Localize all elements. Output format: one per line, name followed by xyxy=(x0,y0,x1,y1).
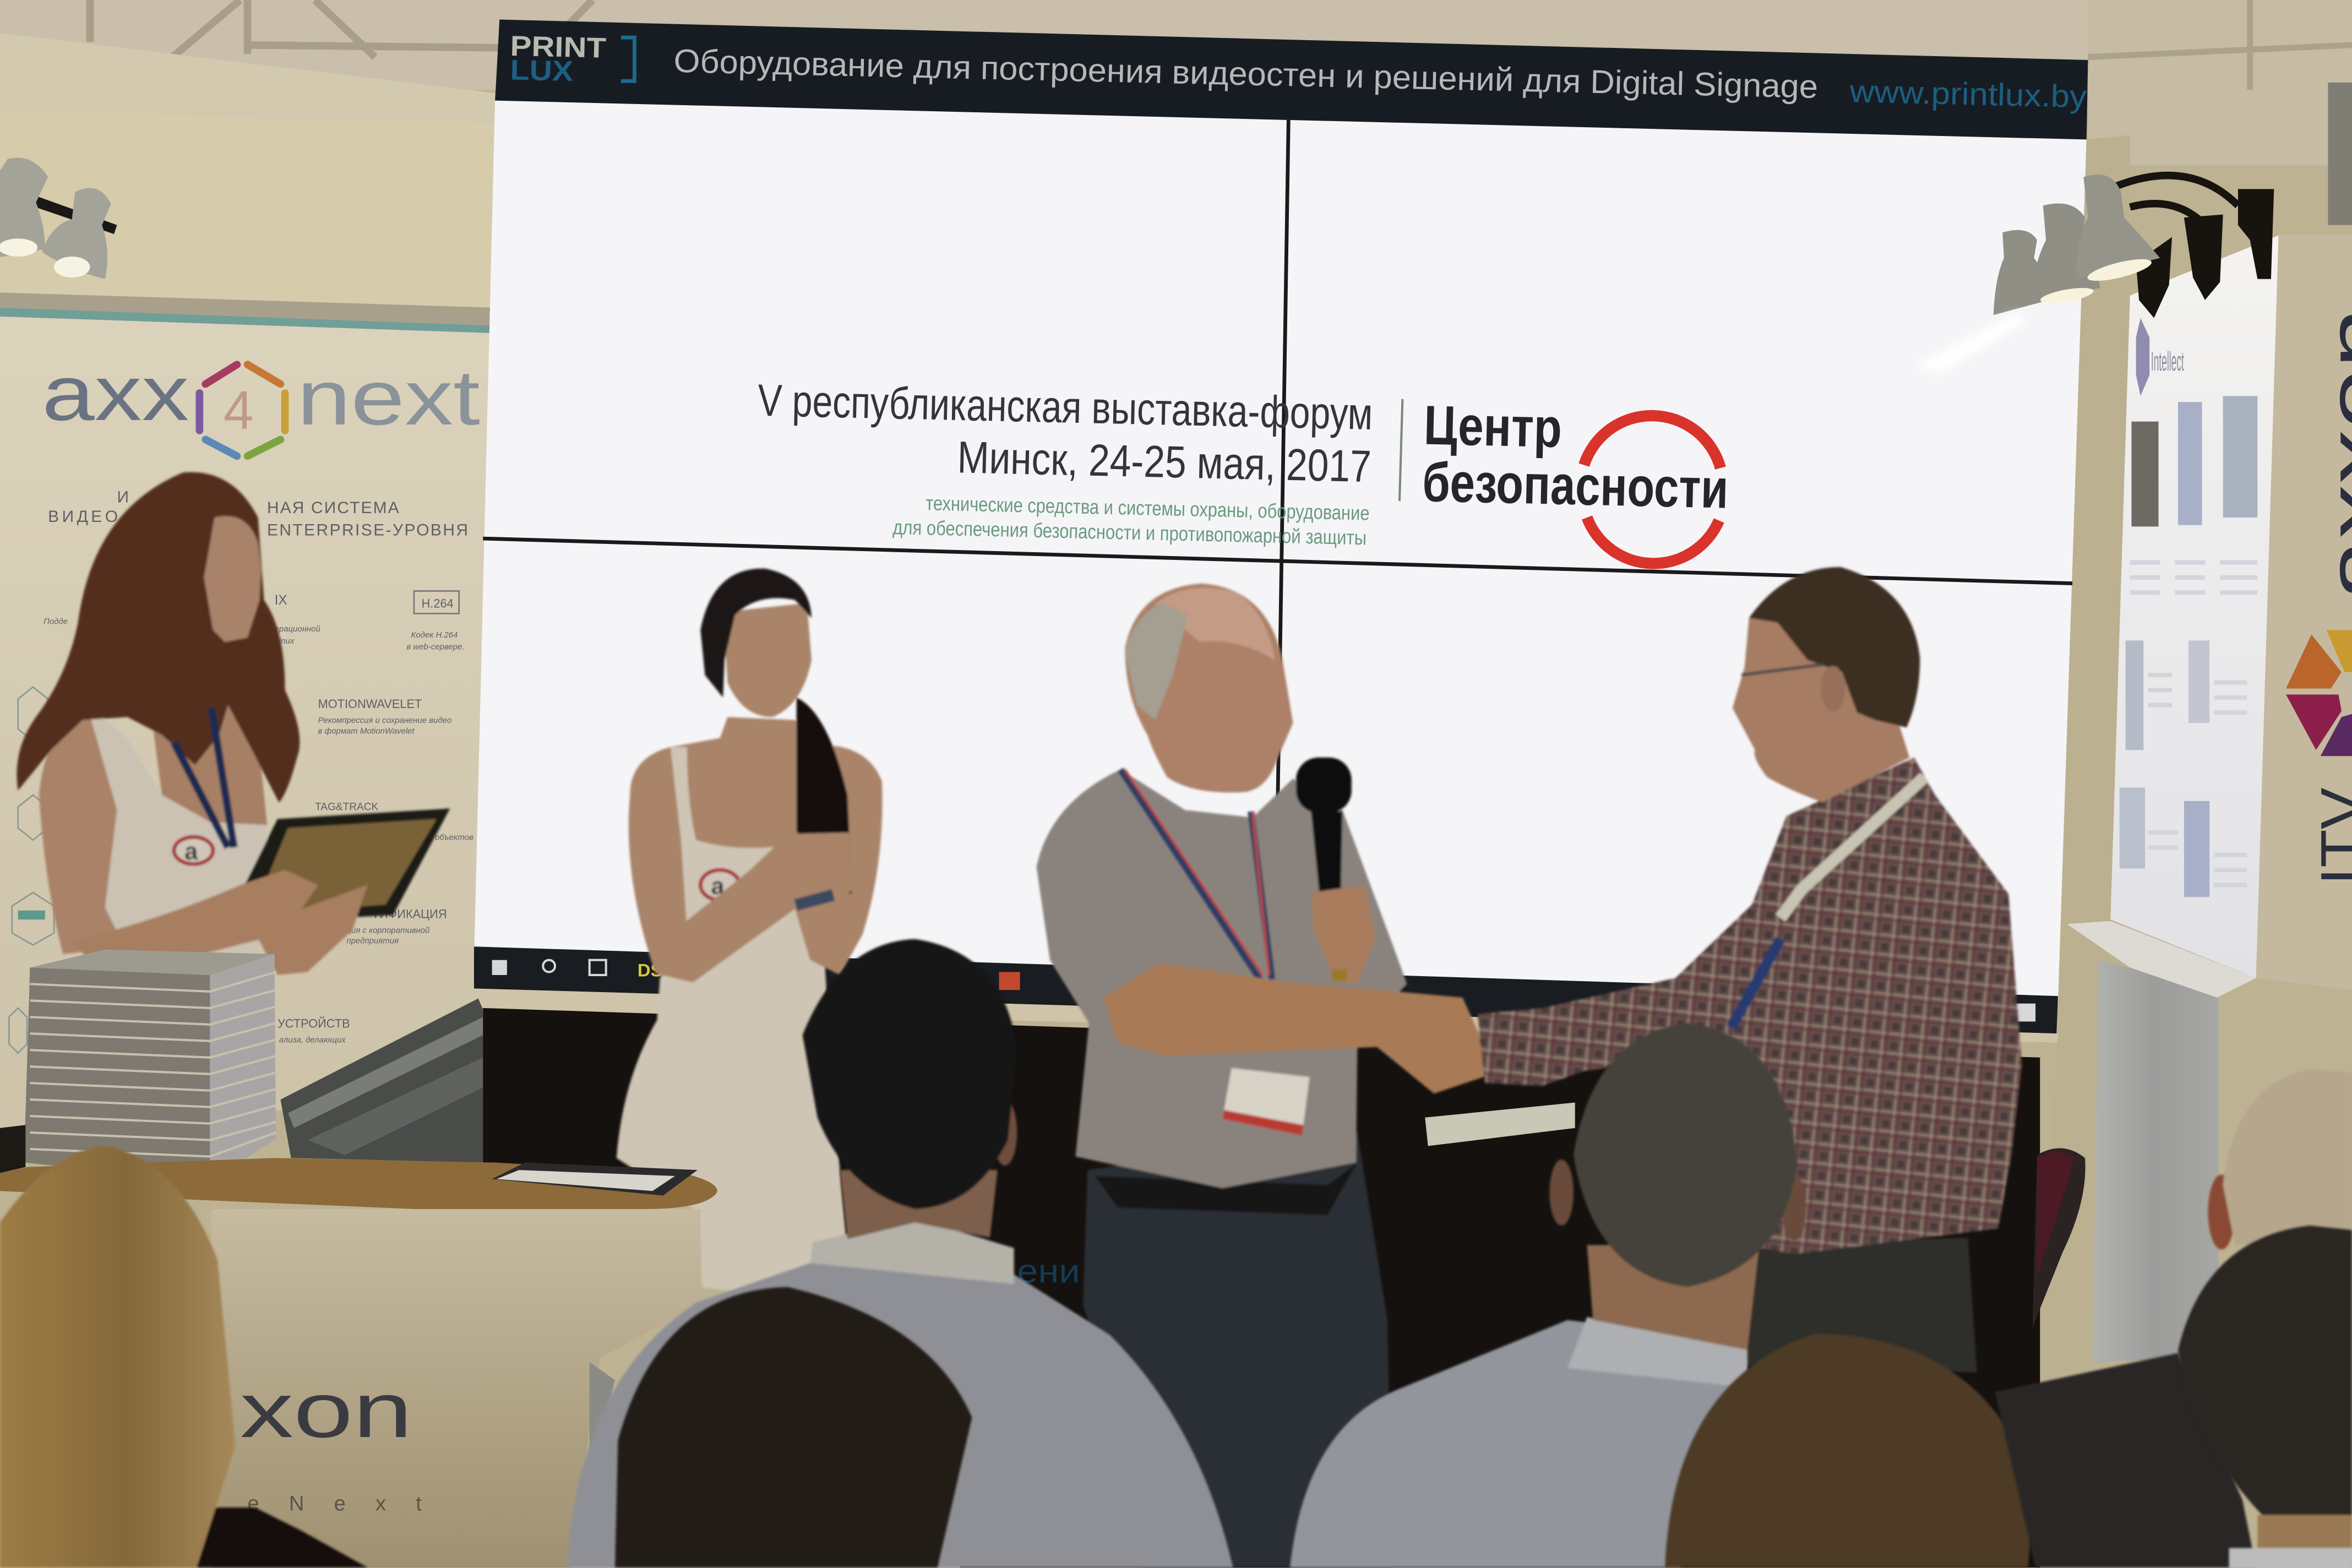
lamp shades xyxy=(1994,230,2049,315)
lanyard xyxy=(174,708,234,847)
hair top xyxy=(700,569,812,698)
hair xyxy=(1749,567,1920,727)
video wall screen xyxy=(474,101,2087,1043)
lanyard xyxy=(1781,777,1925,918)
left lanyard xyxy=(1120,770,1260,979)
dark shoulder xyxy=(188,1507,368,1567)
shirt logo xyxy=(174,837,213,865)
dark stage backdrop xyxy=(483,1008,2040,1567)
neck xyxy=(2257,1515,2352,1551)
banner feature list: Кодек H.264 xyxy=(411,630,458,640)
stack of frames on desk xyxy=(24,950,276,1182)
print lux header banner: LUX xyxy=(510,53,574,87)
banner feature list: в формат MotionWavelet xyxy=(318,726,415,736)
badge xyxy=(1222,1068,1309,1135)
audience: blonde woman at left xyxy=(0,1146,368,1567)
screen title text: V республиканская выставка-форум xyxy=(757,375,1373,439)
centre logo text xyxy=(1422,395,1729,520)
white dress xyxy=(617,747,847,1293)
right wall section xyxy=(2034,135,2130,1380)
long hair xyxy=(0,1146,236,1567)
desk front with axxon logo: e N e x t xyxy=(248,1492,434,1516)
lamps right xyxy=(1994,175,2274,318)
suit xyxy=(1995,1353,2256,1567)
poster logo xyxy=(2136,318,2149,396)
banner logo number: 4 xyxy=(224,380,253,440)
arm in handshake xyxy=(1104,963,1497,1093)
grey hair head xyxy=(2223,1070,2352,1245)
banner feature list: MOTIONWAVELET xyxy=(318,697,422,711)
banner url: www.printlux.by xyxy=(1849,74,2087,115)
video wall screen: для обеспечения безопасности и противопожарной защиты xyxy=(892,516,1367,549)
axxon hexagon logo xyxy=(2286,630,2352,756)
banner feature list: H.264 xyxy=(422,596,454,610)
ear xyxy=(993,1099,1017,1166)
banner feature list: УСТРОЙСТВ xyxy=(277,1016,350,1030)
ear xyxy=(2208,1174,2235,1250)
hair xyxy=(803,939,1017,1209)
centre logo text: безопасности xyxy=(1422,451,1729,520)
audience: foreground brown head xyxy=(1665,1333,2035,1567)
banner feature list: в web-сервере. xyxy=(406,643,465,652)
banner logo: axx: axx xyxy=(42,350,189,437)
lamps left xyxy=(0,158,117,279)
audience: dark head far right xyxy=(2178,1226,2352,1568)
backdrop blue lettering: ени xyxy=(1017,1253,1080,1289)
jeans xyxy=(1083,1133,1392,1567)
head xyxy=(1125,584,1293,792)
banner feature list: TAG&TRACK xyxy=(315,801,379,813)
lamp bulbs xyxy=(2086,255,2153,285)
neck and chest xyxy=(150,630,267,825)
tank top xyxy=(87,705,267,952)
banner logo hexagon xyxy=(199,364,285,456)
long hair xyxy=(17,472,300,803)
right paper poster xyxy=(2110,236,2278,978)
banner feature list: ция с корпоративной xyxy=(346,926,430,935)
microphone xyxy=(1296,758,1352,813)
man in grey shirt holding microphone xyxy=(1037,584,1497,1567)
forearms and hands xyxy=(656,832,863,983)
audience: foreground dark head xyxy=(615,1287,972,1567)
desk front with axxon logo xyxy=(211,1209,700,1567)
red chair xyxy=(2033,1148,2086,1327)
ponytail xyxy=(797,698,852,894)
taskbar icons: DS xyxy=(638,960,662,981)
microphone tail xyxy=(1332,969,1347,981)
banner headline text xyxy=(48,488,468,540)
collar xyxy=(1567,1317,1747,1387)
screen light glare xyxy=(1913,312,2025,372)
wristwatch xyxy=(794,889,835,911)
left upper wall xyxy=(0,90,495,308)
banner feature list: объектов xyxy=(435,833,473,842)
white lightbar product xyxy=(1425,1103,1575,1146)
banner feature list: IX xyxy=(275,593,287,608)
screen subtitle text: технические средства и системы охраны, оборудование xyxy=(925,492,1370,525)
banner small icons xyxy=(9,687,54,1053)
banner headline text: И xyxy=(117,488,129,507)
banner feature list: Рекомпрессия и сохранение видео xyxy=(318,716,451,725)
banner headline text: ENTERPRISE-УРОВНЯ xyxy=(267,521,468,540)
lamp clips xyxy=(2238,189,2274,279)
desk front with axxon logo: xon xyxy=(240,1367,412,1454)
shirt xyxy=(1037,770,1407,1188)
centre logo text: Центр xyxy=(1423,395,1562,459)
banner feature list xyxy=(43,591,473,1045)
left banner: axxon next xyxy=(0,292,491,1128)
shirt xyxy=(1290,1320,1747,1567)
arm and shoulder xyxy=(39,708,150,954)
logo bracket xyxy=(621,37,634,81)
taskbar icons xyxy=(492,960,2035,1021)
banner feature list: ерационной xyxy=(275,624,321,634)
taskbar xyxy=(474,946,2058,1033)
hand on microphone xyxy=(1311,885,1375,983)
man in plaid shirt xyxy=(1478,567,2022,1373)
hair xyxy=(1574,1023,1797,1287)
banner feature list: предприятия xyxy=(346,937,399,946)
centre logo ring xyxy=(1584,416,1721,563)
print lux header banner xyxy=(495,19,2088,141)
monitor image on banner xyxy=(280,996,483,1163)
woman left with certificate xyxy=(17,472,450,975)
banner slogan: Оборудование для построения видеостен и решений для Digital Signage xyxy=(673,42,1819,105)
small dark object at far left xyxy=(0,1125,25,1173)
clipboard xyxy=(492,1163,698,1195)
audience: dark-haired man xyxy=(567,939,1233,1567)
banner headline text: НАЯ СИСТЕМА xyxy=(267,499,399,517)
trousers xyxy=(1733,1238,1977,1373)
ears xyxy=(1549,1159,1574,1226)
collar with lanyard xyxy=(810,1218,1014,1284)
holding hand xyxy=(252,885,368,975)
desk with clipboard xyxy=(0,1158,717,1211)
certificate frame xyxy=(225,809,450,924)
shirt logo: a xyxy=(184,839,198,865)
shirt xyxy=(567,1263,1233,1567)
divider line xyxy=(1400,399,1402,501)
face xyxy=(723,603,812,717)
banner feature list: Linux xyxy=(275,636,295,646)
audience: grey-haired man xyxy=(1290,1023,1806,1567)
woman centre clapping xyxy=(617,569,883,1293)
banner feature list: ализа, делающих xyxy=(279,1036,346,1045)
arms and chest xyxy=(629,717,883,975)
lamp arms xyxy=(2116,176,2238,225)
video wall screen: Минск, 24-25 мая, 2017 xyxy=(957,432,1372,492)
right column xyxy=(2256,234,2352,990)
neck xyxy=(1587,1245,1760,1350)
printlux logo: PRINT xyxy=(510,30,607,64)
shirt logo: a xyxy=(711,873,725,900)
right shelf xyxy=(2067,921,2256,998)
beige strip under screen xyxy=(474,988,2058,1043)
neck and face xyxy=(1733,618,1909,803)
glasses xyxy=(1741,665,1822,675)
banner logo: next: next xyxy=(297,355,480,442)
grey side hair xyxy=(1125,603,1188,720)
collar xyxy=(2229,1548,2352,1568)
banner feature list: Подде xyxy=(43,617,68,626)
banner headline text: ВИДЕО xyxy=(48,508,121,526)
shirt logo xyxy=(700,870,739,900)
face xyxy=(204,516,261,642)
banner feature list: ТИФИКАЦИЯ xyxy=(372,907,447,921)
poster text lines xyxy=(2130,563,2257,885)
ceiling with trusses xyxy=(0,0,2352,225)
ear xyxy=(1821,666,1845,711)
forearm xyxy=(70,870,318,960)
right lanyard xyxy=(1251,812,1272,979)
grey door cabinet xyxy=(2093,960,2219,1362)
right paper poster: Intellect xyxy=(2151,347,2184,377)
poster thumbnails xyxy=(2120,396,2257,897)
audience: man with dark suit at right xyxy=(1995,1070,2352,1567)
neck xyxy=(840,1170,998,1239)
plaid shirt xyxy=(1478,758,2022,1254)
belt xyxy=(1095,1163,1358,1215)
video wall seams xyxy=(1275,120,1288,975)
overhead beam xyxy=(0,33,495,123)
